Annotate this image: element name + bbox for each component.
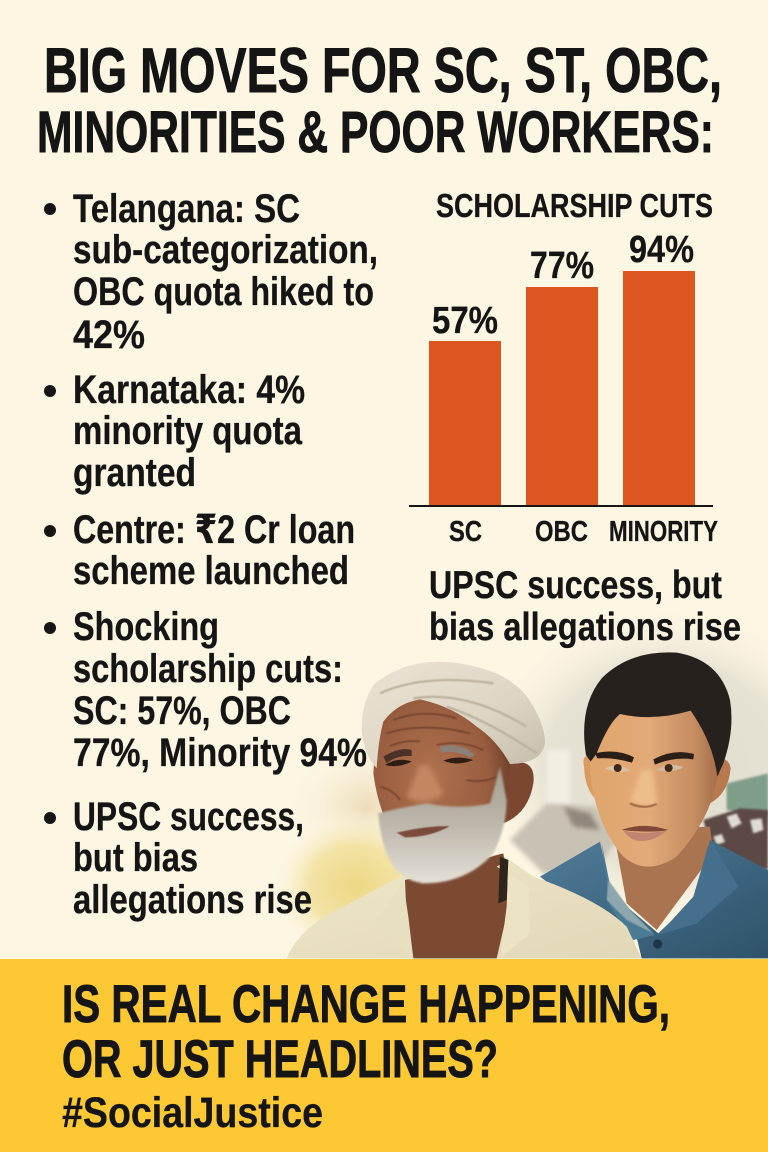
bullet: Centre — [44, 508, 355, 593]
bullet: UPSC — [44, 795, 312, 922]
illustration: portraits of an elderly farmer and a young man — [270, 610, 768, 963]
face — [373, 697, 510, 873]
bullet: Karnataka: granted — [73, 451, 196, 495]
bullet: Karnataka — [44, 368, 305, 495]
chart heading: SCHOLARSHIP CUTS — [436, 187, 713, 224]
bullet: Telangana: Telangana: SC — [73, 187, 300, 231]
lips — [622, 826, 668, 832]
face — [588, 707, 720, 867]
footer question — [62, 975, 670, 1089]
brows — [595, 752, 634, 763]
neck — [613, 827, 713, 930]
brows — [383, 749, 412, 763]
bullet list — [44, 187, 378, 922]
shirt — [540, 840, 768, 958]
young man — [540, 652, 768, 958]
bullet: Telangana: sub-categorization, — [73, 228, 378, 272]
bar: OBC 77%: OBC — [535, 516, 588, 548]
bullet: Telangana: OBC quota hiked to — [73, 270, 374, 314]
bar: SC 57%: SC — [449, 516, 482, 548]
bullet: Centre: Centre: ₹2 Cr loan — [73, 508, 355, 552]
chart axis — [409, 505, 713, 507]
beard — [378, 767, 507, 883]
bullet: Shocking scholarship cuts: SC: 57%, OBC — [73, 689, 291, 733]
eyes — [385, 760, 412, 766]
bullet: UPSC: UPSC success, — [73, 795, 304, 839]
elderly farmer — [287, 662, 642, 958]
ears — [583, 756, 597, 800]
bar: Minority 94% — [609, 229, 718, 548]
bar chart: scholarship cuts — [409, 187, 718, 548]
bullet: Shocking scholarship cuts: Shocking — [73, 605, 219, 649]
hashtag: #SocialJustice — [62, 1089, 323, 1137]
bullet: UPSC: but bias — [73, 836, 198, 880]
bullet: Shocking scholarship cuts — [44, 605, 367, 775]
bullet: Telangana: 42% — [73, 313, 145, 357]
bullet: Telangana — [44, 187, 378, 357]
bar: Minority 94%: MINORITY — [609, 516, 718, 548]
bullet: Karnataka: minority quota — [73, 409, 303, 453]
footer question: OR JUST HEADLINES? — [62, 1030, 498, 1089]
eyes — [605, 765, 630, 772]
nose — [407, 765, 443, 802]
neck — [405, 853, 510, 958]
hair — [584, 652, 731, 777]
turban — [362, 662, 545, 768]
nose — [630, 770, 657, 806]
forehead wrinkles — [380, 714, 497, 800]
bullet: Karnataka: Karnataka: 4% — [73, 368, 305, 412]
bullet: Centre: scheme launched — [73, 549, 349, 593]
bullet: UPSC: allegations rise — [73, 878, 312, 922]
ear — [503, 762, 534, 823]
bullet: Shocking scholarship cuts: 77%, Minority 94% — [73, 731, 367, 775]
bar: SC 57% — [429, 300, 501, 548]
footer band — [0, 959, 768, 1152]
bullet: Shocking scholarship cuts: scholarship cuts: — [73, 647, 343, 691]
bar: OBC 77% — [526, 245, 598, 548]
cream shirt — [287, 853, 642, 958]
caption: UPSC — [429, 564, 741, 649]
title — [37, 36, 722, 165]
bar: SC 57%: 57% — [432, 300, 498, 342]
mouth — [397, 826, 450, 837]
backdrop: hazy field scene — [270, 610, 768, 963]
bar: Minority 94%: 94% — [629, 229, 694, 271]
bar: OBC 77%: 77% — [530, 245, 594, 287]
